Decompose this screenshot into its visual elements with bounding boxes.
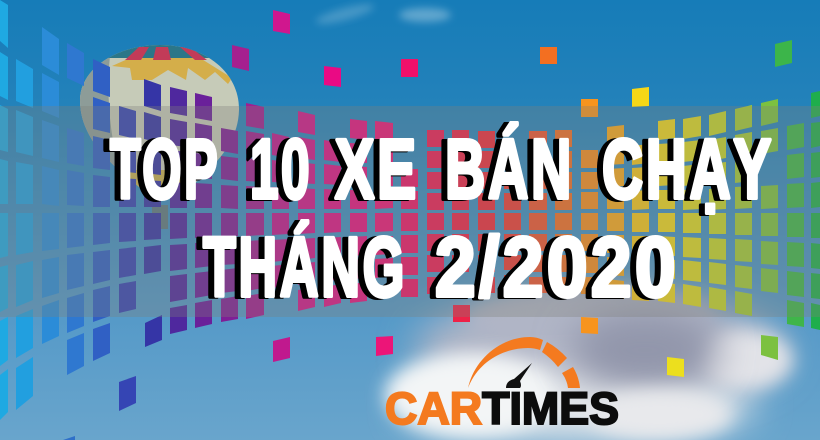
clouds [314, 0, 793, 440]
hot air balloon [78, 40, 239, 229]
title line 1: 10 [250, 122, 312, 216]
logo wordmark: CARTIMES [385, 383, 619, 434]
logo needle [506, 363, 532, 388]
logo: CarTimes [385, 337, 619, 434]
title line 2: 2/2020 [435, 220, 679, 314]
title line 1 [110, 122, 774, 216]
title line 2: THÁNG [203, 220, 407, 314]
logo gauge arc [468, 337, 580, 388]
title line 1: TOP [110, 122, 220, 216]
translucent title band [0, 106, 820, 317]
title line 1: BÁN [445, 122, 574, 216]
title line 1: XE [335, 122, 419, 216]
title line 2 [203, 220, 679, 314]
title [110, 122, 774, 314]
